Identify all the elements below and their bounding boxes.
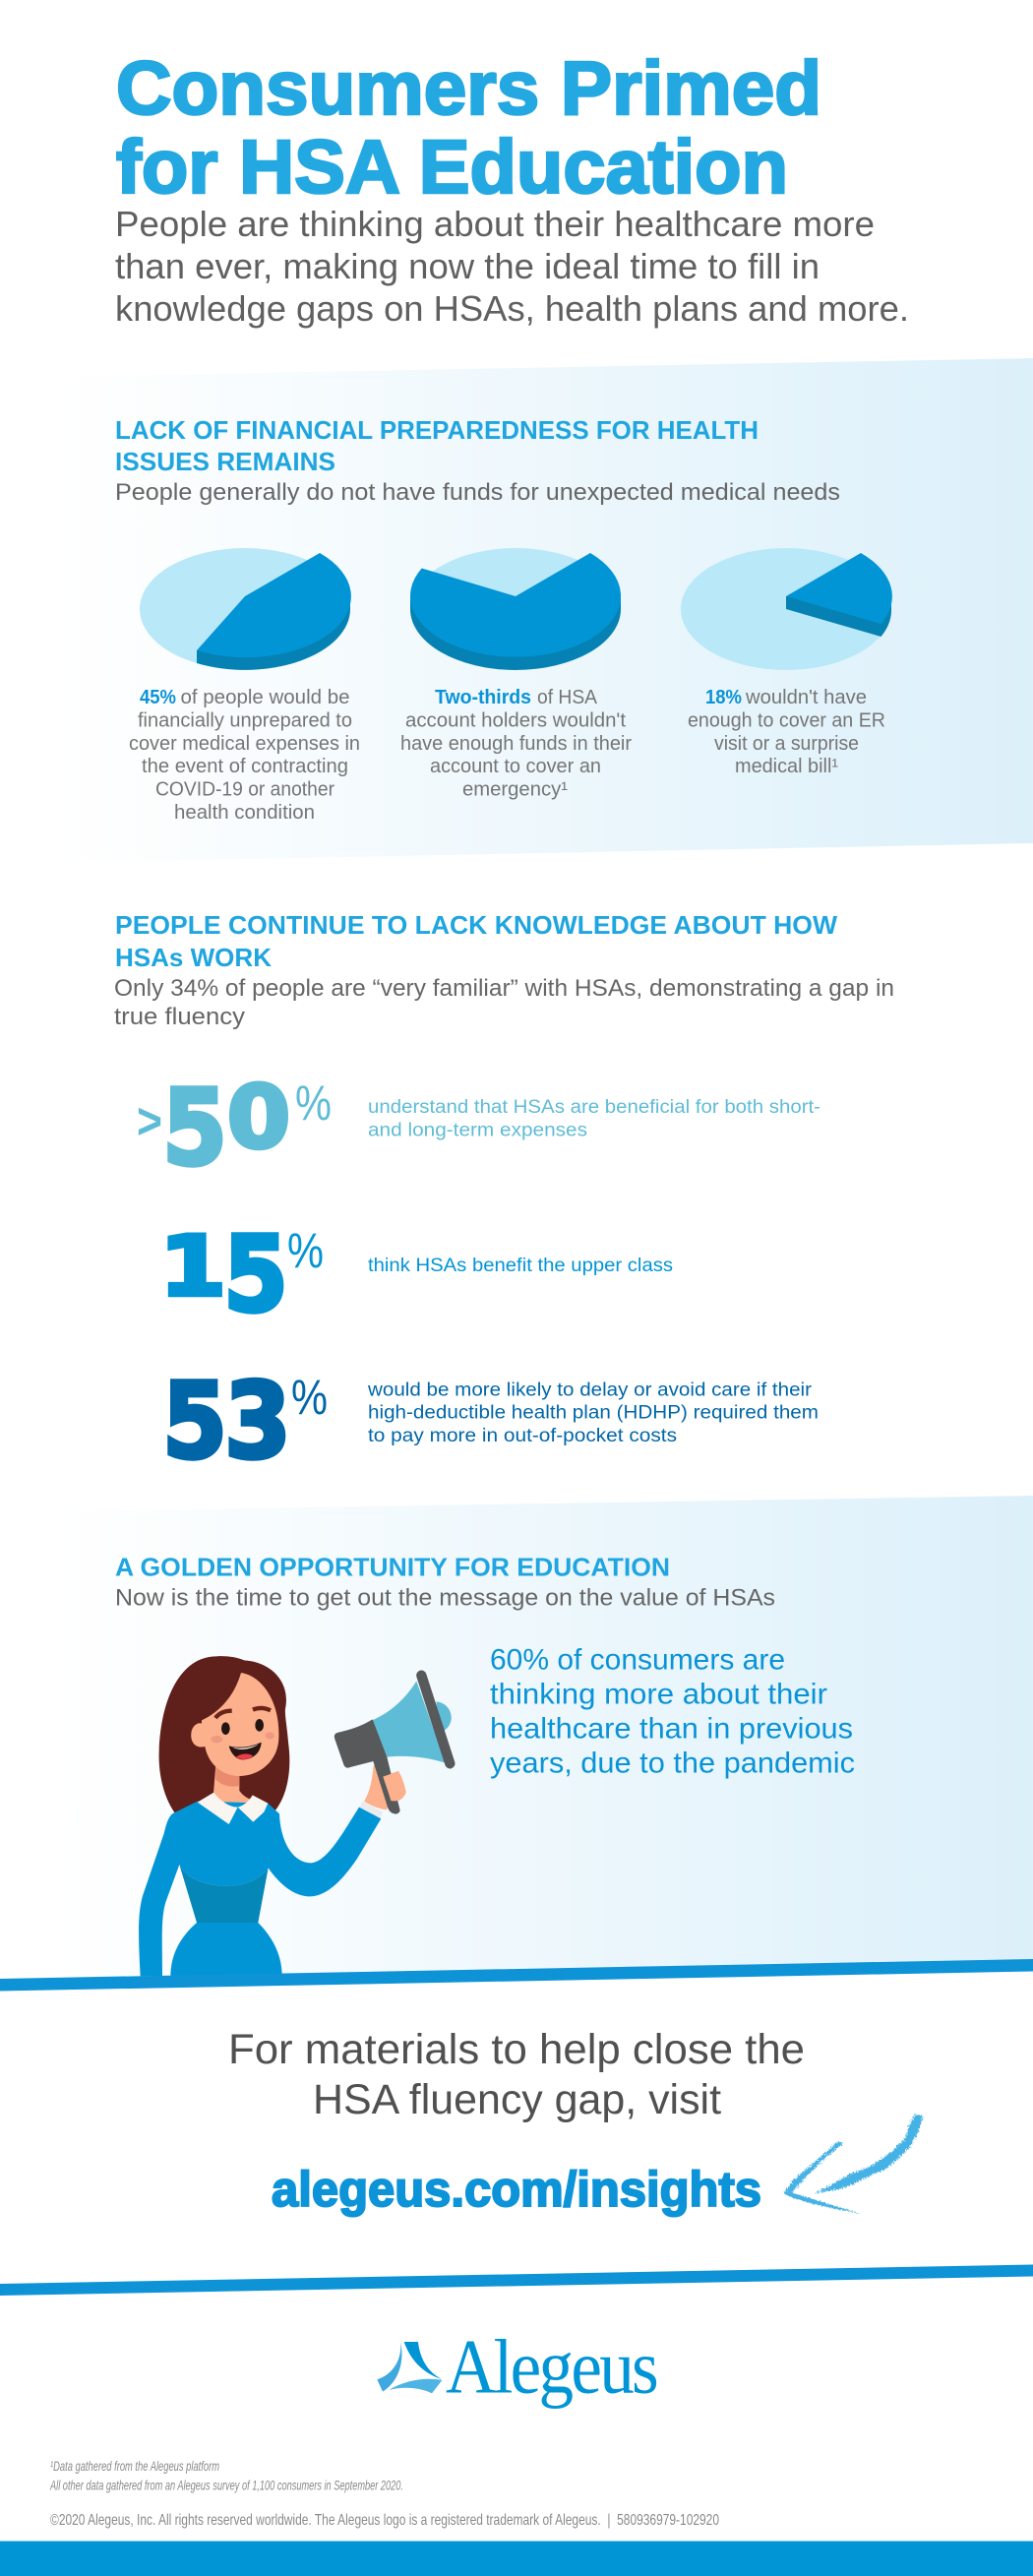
stat: 15% xyxy=(159,1214,324,1335)
callout: 60% of consumers: healthcare than in previous xyxy=(490,1713,853,1746)
heading: financial preparedness: ISSUES REMAINS xyxy=(115,447,335,476)
caption: 18%: enough to cover an ER xyxy=(688,710,885,732)
section: knowledge about HSAs xyxy=(114,910,894,1482)
subheading: funds: People generally do not have funds for unexpected medical needs xyxy=(115,479,840,506)
stat: more than 50%: 0 xyxy=(227,1068,290,1168)
callout: 60% of consumers: thinking more about their xyxy=(490,1679,827,1711)
caption: 18%: wouldn't have xyxy=(745,687,867,708)
caption: two-thirds: account holders wouldn't xyxy=(405,710,626,732)
cuff xyxy=(360,1802,383,1817)
heading: golden opportunity: A GOLDEN OPPORTUNITY FOR EDUCATION xyxy=(115,1553,670,1582)
stat text: 53%: would be more likely to delay or avoid care if their xyxy=(367,1380,813,1401)
footnotes: ¹Data gathered from the Alegeus platform xyxy=(50,2458,219,2474)
footnotes: All other data gathered from an Alegeus survey of 1,100 consumers in September 2020. xyxy=(49,2478,403,2493)
caption: 45%: health condition xyxy=(174,802,315,824)
caption: 45%: cover medical expenses in xyxy=(129,733,360,755)
stat text: 53% xyxy=(367,1380,819,1446)
stat text: 15%: think HSAs benefit the upper class xyxy=(368,1256,673,1276)
caption: 45% xyxy=(129,687,360,824)
caption: two-thirds: Two-thirds xyxy=(435,687,531,708)
heading: knowledge: HSAs WORK xyxy=(115,943,272,972)
subtitle xyxy=(115,204,909,329)
icon: hand-drawn arrow xyxy=(784,2115,923,2214)
stat text: 53%: to pay more in out-of-pocket costs xyxy=(368,1426,677,1446)
neck xyxy=(213,1764,254,1810)
subheading: fluency xyxy=(114,975,894,1030)
caption: two-thirds xyxy=(400,687,632,801)
caption: 45%: the event of contracting xyxy=(142,756,348,777)
hand xyxy=(364,1764,406,1809)
logo wordmark: Alegeus xyxy=(446,2324,657,2410)
footer bar xyxy=(0,2541,1033,2576)
stat text: more than 50%: understand that HSAs are beneficial for both short- xyxy=(368,1097,820,1118)
title: for HSA Education xyxy=(116,125,788,210)
stat: 53%: 3 xyxy=(224,1361,291,1482)
panel: golden opportunity xyxy=(0,1496,1033,1984)
caption: two-thirds: emergency¹ xyxy=(462,779,568,801)
heading: knowledge xyxy=(115,910,837,972)
caption: 18%: medical bill¹ xyxy=(735,756,838,777)
heading: financial preparedness: LACK OF FINANCIAL PREPAREDNESS FOR HEALTH xyxy=(115,415,759,445)
logo: Alegeus xyxy=(377,2324,657,2410)
pie chart: two-thirds xyxy=(410,548,621,670)
caption: two-thirds: of HSA xyxy=(537,687,598,708)
stat text: more than 50%: and long-term expenses xyxy=(368,1120,587,1141)
caption: 18%: 18% xyxy=(705,687,742,708)
logo mark xyxy=(377,2342,443,2393)
caption: 18%: visit or a surprise xyxy=(714,733,859,755)
subtitle: than ever, making now the ideal time to fill in xyxy=(115,246,820,286)
subheading: message: Now is the time to get out the message on the value of HSAs xyxy=(115,1585,775,1612)
mouth xyxy=(229,1743,262,1759)
caption: two-thirds: have enough funds in their xyxy=(400,733,632,755)
subheading: fluency: Only 34% of people are “very familiar” with HSAs, demonstrating a gap in xyxy=(114,975,894,1002)
call to action text: HSA fluency gap, visit xyxy=(313,2076,721,2123)
megaphone xyxy=(334,1676,452,1814)
fingers xyxy=(383,1771,406,1801)
stat: 15%: % xyxy=(287,1223,324,1278)
stat: more than 50% xyxy=(137,1068,332,1189)
callout: 60% of consumers xyxy=(490,1644,855,1780)
caption: two-thirds: account to cover an xyxy=(430,756,601,777)
footnotes xyxy=(49,2458,403,2493)
dress xyxy=(139,1802,381,1976)
subtitle: knowledge gaps on HSAs, health plans and more. xyxy=(115,288,909,329)
collar xyxy=(198,1793,268,1824)
stat text: 53%: high-deductible health plan (HDHP) required them xyxy=(368,1403,819,1423)
title: Consumers Primed xyxy=(116,46,821,131)
caption: 45%: of people would be xyxy=(181,687,350,708)
heading: financial preparedness xyxy=(115,415,759,476)
bottom blue band xyxy=(0,2265,1033,2296)
caption: 18% xyxy=(688,687,885,777)
link: alegeus.com/insights: alegeus.com/insights xyxy=(272,2162,761,2217)
stat: 15%: 1 xyxy=(159,1218,226,1315)
title xyxy=(116,46,821,210)
stat: more than 50%: > xyxy=(137,1093,162,1150)
stat: 53%: 5 xyxy=(162,1361,227,1482)
pie chart: 45% xyxy=(140,548,351,670)
caption: 45%: COVID-19 or another xyxy=(155,779,334,801)
stat: 15%: 5 xyxy=(223,1214,288,1335)
top blue band xyxy=(0,1959,1033,1992)
call to action text: For materials to help close the xyxy=(228,2026,805,2073)
panel: lack of financial preparedness xyxy=(0,358,1033,864)
caption: 45%: financially unprepared to xyxy=(138,710,352,732)
hair xyxy=(159,1656,289,1813)
copyright: ©2020 Alegeus, Inc. All rights reserved worldwide. The Alegeus logo is a registered trademark of Alegeus. | 580936979-102920 xyxy=(50,2512,719,2529)
stat: more than 50%: 5 xyxy=(162,1068,227,1189)
pie chart: 18% xyxy=(681,548,892,670)
face xyxy=(191,1673,278,1776)
illustration: woman with megaphone xyxy=(139,1656,452,1976)
stat: 53%: % xyxy=(291,1370,328,1425)
call to action text xyxy=(228,2026,805,2123)
stat: more than 50%: % xyxy=(295,1075,332,1131)
eyebrows and eyes xyxy=(211,1708,274,1743)
subheading: fluency: true fluency xyxy=(114,1004,245,1030)
stat: 53% xyxy=(162,1361,328,1482)
caption: 45%: 45% xyxy=(140,687,176,708)
callout: 60% of consumers: years, due to the pandemic xyxy=(490,1748,855,1780)
stat text: more than 50% xyxy=(368,1097,820,1141)
subtitle: People are thinking about their healthcare more xyxy=(115,204,875,244)
heading: knowledge: PEOPLE CONTINUE TO LACK KNOWLEDGE ABOUT HOW xyxy=(115,910,837,940)
callout: 60% of consumers: 60% of consumers are xyxy=(490,1644,785,1677)
